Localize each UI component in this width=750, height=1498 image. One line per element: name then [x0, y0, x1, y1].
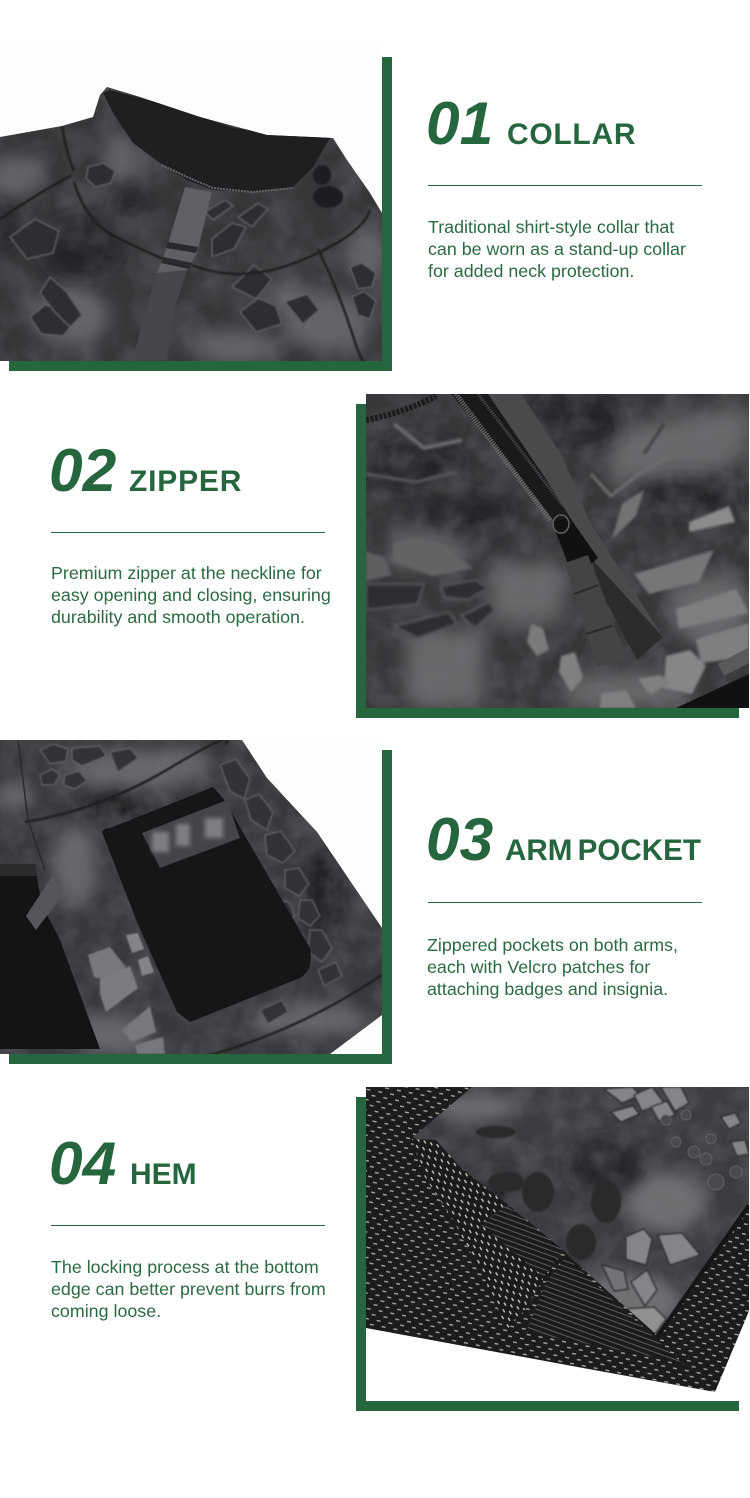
zipper tape	[451, 394, 571, 534]
text: zipper description	[51, 563, 331, 627]
pull tab	[565, 555, 627, 667]
camo cells	[10, 163, 376, 336]
text: pocket description: Zippered pockets on both arms,	[427, 935, 678, 955]
seams	[0, 126, 380, 369]
heading: 03 ARM POCKET: ARM POCKET	[505, 834, 701, 867]
zipper slider	[552, 518, 598, 568]
right hem stitching	[657, 1205, 749, 1337]
heading: 02 ZIPPER: 02	[49, 436, 116, 504]
dark blots and cells	[476, 1126, 621, 1260]
frame: collar photo green border	[9, 57, 392, 371]
photo: arm pocket	[0, 740, 382, 1054]
fabric flap	[142, 800, 240, 868]
photo: jacket zipper	[366, 394, 749, 708]
heading: 01 COLLAR: COLLAR	[507, 118, 636, 151]
hex cells	[40, 744, 342, 1024]
text: hem description: edge can better prevent burrs from	[51, 1279, 326, 1299]
striped inner	[526, 1257, 686, 1367]
mesh fold	[412, 1139, 563, 1330]
camo outer fabric	[413, 1087, 749, 1334]
text: hem description	[51, 1257, 326, 1321]
seam top-left	[366, 396, 436, 420]
heading: 02 ZIPPER: ZIPPER	[129, 465, 242, 498]
flap	[476, 394, 663, 660]
panel: collar	[0, 57, 702, 371]
mesh fabric	[366, 1087, 749, 1392]
light patches	[88, 933, 165, 1054]
heading: 03 ARM POCKET	[426, 805, 701, 873]
heading: 04 HEM: 04	[49, 1129, 116, 1197]
black corner	[676, 674, 749, 708]
frame: hem photo green border	[356, 1097, 739, 1411]
photo: jacket hem	[366, 1087, 749, 1392]
frame: zipper photo green border	[356, 404, 739, 718]
panel: arm pocket	[0, 740, 702, 1064]
text: hem description: The locking process at the bottom	[51, 1257, 319, 1277]
velcro patch	[102, 787, 311, 1022]
photo: jacket collar	[0, 87, 382, 361]
inner collar	[103, 90, 330, 192]
text: collar description	[428, 217, 686, 281]
heading: 04 HEM	[49, 1129, 197, 1197]
frame: pocket photo green border	[9, 750, 392, 1064]
text: pocket description: attaching badges and insignia.	[427, 979, 668, 999]
text: pocket description: each with Velcro patches for	[427, 957, 650, 977]
heading: 02 ZIPPER	[49, 436, 242, 504]
heading: 01 COLLAR: 01	[426, 89, 493, 157]
heading: 03 ARM POCKET: 03	[426, 805, 493, 873]
text: collar description: Traditional shirt-style collar that	[428, 217, 674, 237]
text: zipper description: Premium zipper at the neckline for	[51, 563, 322, 583]
heading: 04 HEM: HEM	[130, 1158, 197, 1191]
text: zipper description: durability and smooth operation.	[51, 607, 305, 627]
panel: hem	[49, 1087, 749, 1411]
panel: zipper	[49, 394, 749, 718]
text: hem description: coming loose.	[51, 1301, 161, 1321]
placket	[136, 270, 187, 360]
pull strap	[26, 876, 59, 930]
black left lining	[0, 872, 100, 1049]
seams	[25, 739, 382, 1055]
heading: 01 COLLAR	[426, 89, 636, 157]
text: collar description: for added neck protection.	[428, 261, 634, 281]
camo cells	[366, 424, 749, 708]
text: pocket description	[427, 935, 678, 999]
text: zipper description: easy opening and closing, ensuring	[51, 585, 331, 605]
text: collar description: can be worn as a stand-up collar	[428, 239, 686, 259]
